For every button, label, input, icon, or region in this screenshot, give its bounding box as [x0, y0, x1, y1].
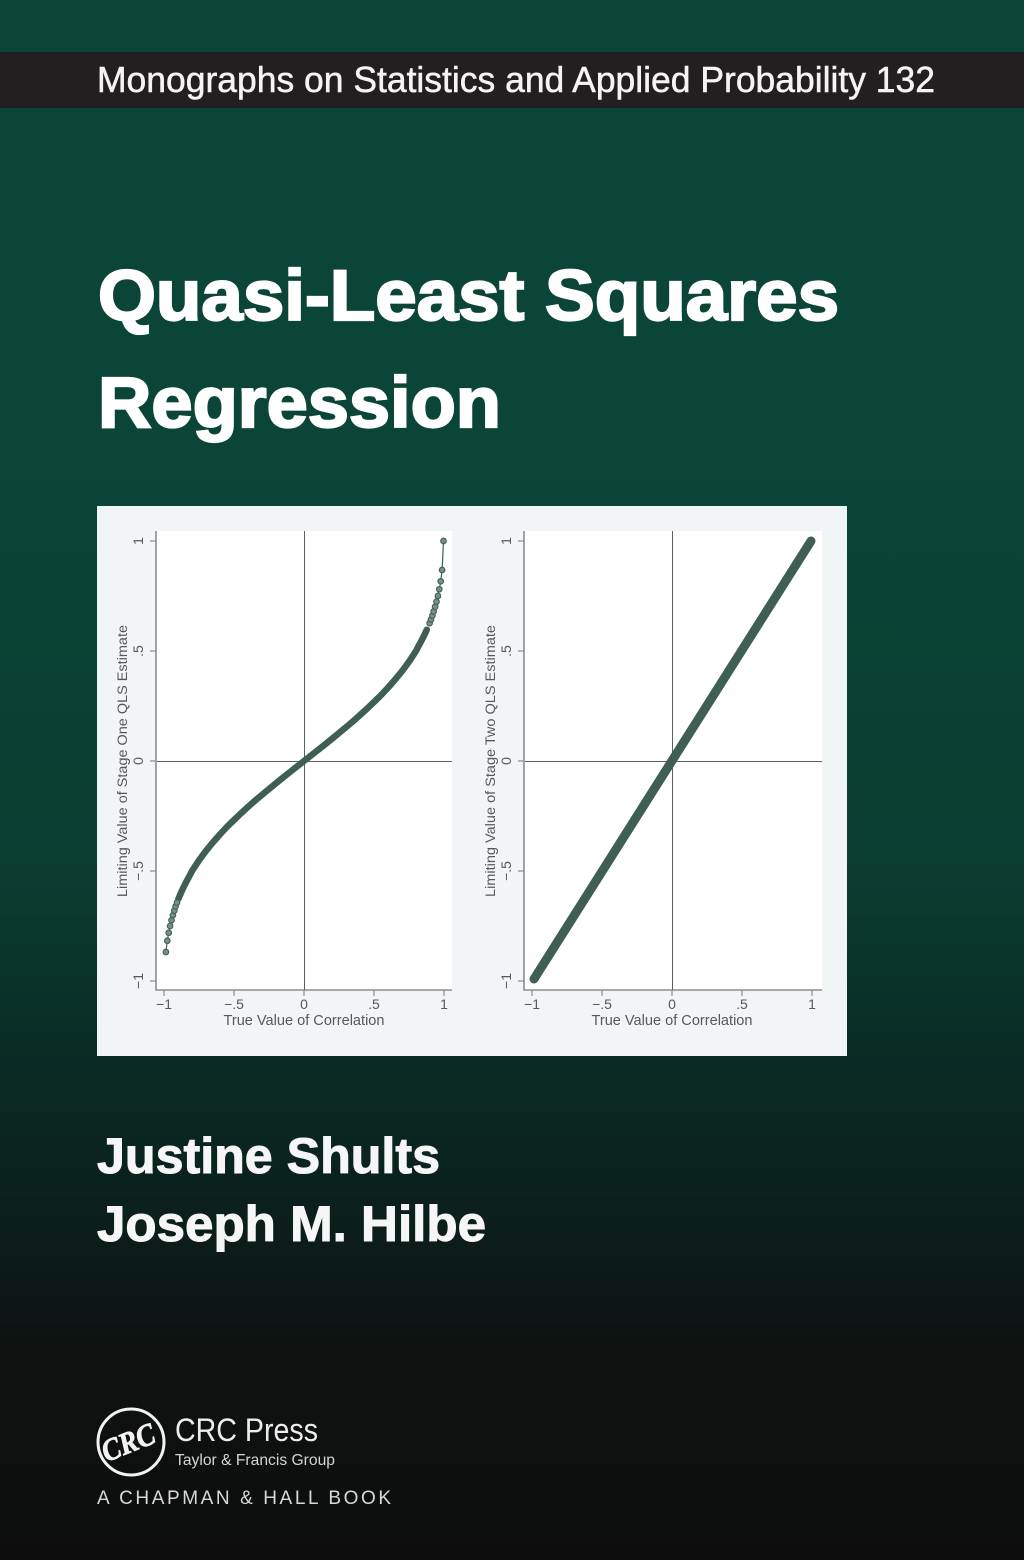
- chart: stage two estimate: 0: [498, 757, 514, 765]
- chart: stage one estimate: −.5: [224, 996, 244, 1012]
- chart: stage two estimate: True Value of Correlation: [592, 1013, 752, 1029]
- series banner: [0, 52, 1024, 108]
- chart: stage one estimate: [115, 531, 452, 1029]
- series banner: Monographs on Statistics and Applied Probability 132: [97, 59, 935, 100]
- publisher logo: [96, 1409, 391, 1509]
- chart: stage one estimate: −1: [156, 996, 172, 1012]
- chart: stage two estimate: Limiting Value of Stage Two QLS Estimate: [483, 625, 498, 897]
- chart: stage one estimate: 1: [440, 996, 448, 1012]
- chart: stage one estimate: 0: [130, 757, 146, 765]
- publisher group: Taylor & Francis Group: [175, 1452, 335, 1469]
- panel: charts: [97, 506, 847, 1056]
- authors: Justine Shults: [97, 1128, 440, 1184]
- curve: [163, 538, 446, 955]
- title: Regression: [98, 364, 501, 443]
- imprint: A CHAPMAN & HALL BOOK: [97, 1488, 391, 1509]
- chart: stage two estimate: −.5: [498, 861, 514, 881]
- chart: stage two estimate: 1: [498, 537, 514, 545]
- chart: stage two estimate: −1: [498, 973, 514, 989]
- chart: stage two estimate: −.5: [592, 996, 612, 1012]
- chart: stage one estimate: Limiting Value of Stage One QLS Estimate: [115, 625, 130, 897]
- chart: stage two estimate: 1: [808, 996, 816, 1012]
- chart: stage one estimate: −.5: [130, 861, 146, 881]
- icon: CRC circle: CRC: [96, 1416, 160, 1469]
- chart: stage two estimate: 0: [668, 996, 676, 1012]
- chart: stage one estimate: −1: [130, 973, 146, 989]
- chart: stage two estimate: [483, 531, 822, 1029]
- chart: stage two estimate: .5: [736, 996, 748, 1012]
- chart: stage one estimate: 0: [300, 996, 308, 1012]
- authors: [97, 1128, 486, 1252]
- chart: stage two estimate: .5: [498, 645, 514, 657]
- line: [534, 541, 811, 979]
- title: Quasi-Least Squares: [98, 257, 839, 336]
- chart: stage one estimate: 1: [130, 537, 146, 545]
- chart: stage one estimate: .5: [130, 645, 146, 657]
- chart: stage one estimate: True Value of Correlation: [224, 1013, 384, 1029]
- title: [98, 257, 839, 443]
- publisher name: CRC Press: [175, 1412, 318, 1448]
- chart: stage two estimate: −1: [524, 996, 540, 1012]
- chart: stage one estimate: .5: [368, 996, 380, 1012]
- authors: Joseph M. Hilbe: [97, 1196, 486, 1252]
